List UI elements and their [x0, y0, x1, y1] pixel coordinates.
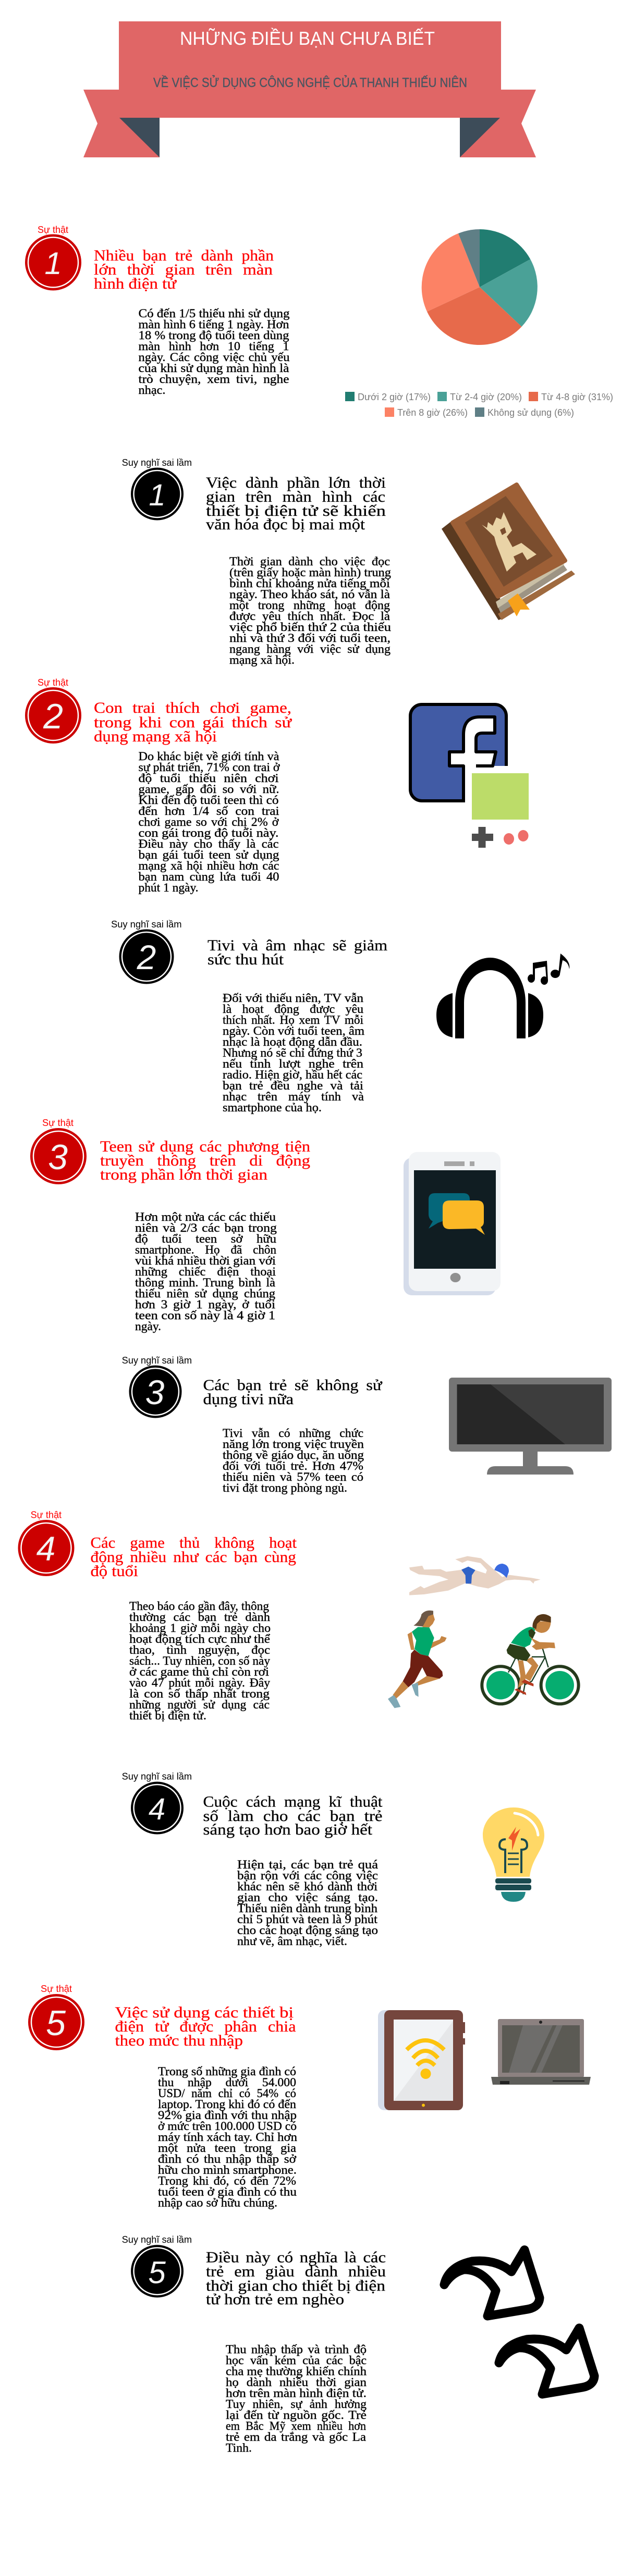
heading: fact 3 [100, 1138, 310, 1183]
text block: fact 2: sự phát triển, 71% con trai ở [139, 761, 280, 774]
heading: myth 1: Việc dành phần lớn thời [206, 474, 386, 491]
heading: fact 4: Các game thủ không hoạt [91, 1534, 297, 1552]
text block: myth 4: như vẽ, âm nhạc, viết. [237, 1935, 347, 1948]
text block: myth 5: cha mẹ thường khiến chính [226, 2364, 367, 2378]
heading: myth 4 [203, 1793, 383, 1838]
panel: fact 1 [25, 225, 613, 418]
text block: myth 1: ngày. Theo khảo sát, nó vẫn là [229, 588, 390, 601]
heading: myth 1 [206, 474, 386, 533]
heading: myth 3: dụng tivi nữa [203, 1391, 294, 1408]
heading: myth 5 [206, 2249, 386, 2308]
label: fact: Sự thật [38, 225, 68, 235]
panel: myth 5 [122, 2234, 594, 2454]
text block: myth 1: mạng xã hội. [229, 653, 295, 666]
chart legend: Từ 4-8 giờ (31%) [541, 392, 613, 402]
label: myth: Suy nghĩ sai lầm [122, 2234, 192, 2245]
heading: fact 1: lớn thời gian trên màn [94, 261, 273, 278]
text block: fact 2: con gái trong độ tuổi này. [139, 826, 278, 839]
text block: fact 5: USD/ năm chỉ có 54% có [158, 2087, 296, 2100]
text block: fact 3: thông minh. Trung bình là [135, 1276, 275, 1289]
text block: myth 3: Tivi vẫn có những chức [223, 1427, 363, 1440]
heading: fact 5: điện tử được phân chia [115, 2018, 296, 2035]
heading: myth 2: sức thu hút [208, 951, 284, 968]
text block: myth 5 [226, 2343, 367, 2454]
panel: fact 3 [30, 1118, 501, 1333]
text block: myth 1: được yêu thích nhất. Đọc là [229, 610, 390, 623]
text block: fact 3: niên và 2/3 các bạn trong [135, 1221, 277, 1234]
text block: fact 2: Do khác biệt về giới tính và [139, 750, 279, 763]
text block: fact 5: máy tính xách tay. Chỉ hơn [158, 2131, 298, 2144]
heading: myth 3: Các bạn trẻ sẽ không sử [203, 1377, 383, 1394]
text block: fact 5: hữu cho mình smartphone. [158, 2163, 297, 2176]
chart legend [345, 392, 613, 418]
badge: fact 4 [18, 1520, 74, 1576]
text block: fact 2: mạng xã hội nhiều hơn các [139, 859, 279, 872]
text block: myth 3: thiếu niên và 57% teen có [223, 1470, 363, 1483]
heading: myth 1: thiết bị điện tử sẽ khiến [206, 502, 386, 519]
badge: fact 3 [30, 1128, 87, 1184]
heading: myth 1: gian trên màn hình các [206, 488, 385, 505]
text block: myth 2: thích nhất. Họ xem TV mỗi [223, 1013, 363, 1026]
icon: smartphone [404, 1152, 501, 1295]
label: fact: Sự thật [42, 1118, 74, 1128]
heading: myth 5: Điều này có nghĩa là các [206, 2249, 386, 2266]
text block: fact 3: vùi khá nhiều thời gian với [135, 1254, 276, 1267]
text block: myth 4: cho các hoạt động sáng tạo [237, 1924, 378, 1937]
heading: myth 1: văn hóa đọc bị mai một [206, 516, 365, 533]
badge: myth 2 [119, 930, 174, 984]
arrow: second curved arrow [499, 2328, 594, 2394]
text block: myth 2: ngày. Còn với tuổi teen, âm [223, 1024, 364, 1037]
text block: fact 5: đình có thu nhập thấp sở [158, 2152, 297, 2165]
text block: myth 2: Đối với thiếu niên, TV vẫn [223, 992, 364, 1005]
text block: myth 2: nếu tính lượt nghe trên [223, 1057, 364, 1070]
text block: myth 5: hơn trên màn hình điện tử. [226, 2386, 367, 2400]
icon: swimmer [409, 1556, 541, 1595]
text block: myth 4 [237, 1858, 378, 1948]
text block: myth 3 [223, 1427, 364, 1494]
heading: myth 2 [208, 937, 387, 968]
text block: fact 4: là con số thấp nhất trong [129, 1687, 270, 1700]
label: myth: Suy nghĩ sai lầm [122, 1355, 192, 1366]
text block: myth 3: tivi đặt trong phòng ngủ. [223, 1481, 347, 1494]
badge: myth 3: 3 [145, 1373, 165, 1411]
heading: fact 5: Việc sử dụng các thiết bị [115, 2004, 294, 2021]
text block: fact 2: phút 1 ngày. [139, 881, 198, 894]
heading: fact 4: động nhiều như các bạn cùng [91, 1549, 296, 1566]
text block: fact 5: thu nhập dưới 54.000 [158, 2076, 296, 2089]
text block: fact 2: game, gấp đôi so với nữ. [139, 783, 279, 796]
text block: fact 2: độ tuổi thiếu niên chơi [139, 772, 278, 785]
main title: NHỮNG ĐIỀU BẠN CHƯA BIẾT [180, 28, 435, 49]
label: myth: Suy nghĩ sai lầm [111, 919, 181, 930]
heading: myth 4: số làm cho các bạn trẻ [203, 1807, 383, 1825]
icon: book [442, 485, 575, 620]
text block: fact 1: màn hình 6 tiếng 1 ngày. Hơn [139, 318, 289, 331]
icon: light bulb [483, 1807, 544, 1902]
text block: myth 5: học vấn kém của các bậc [226, 2354, 367, 2367]
text block: fact 1: trò chuyện, xem tivi, nghe [139, 373, 289, 386]
icon: tablet with wifi [378, 2010, 465, 2110]
text block: myth 5: lại đến từ nguồn gốc. Trẻ [226, 2408, 367, 2422]
text block: fact 5: 92% gia đình với thu nhập [158, 2109, 297, 2122]
badge: myth 4: 4 [149, 1792, 165, 1826]
heading: fact 4 [91, 1534, 297, 1580]
text block: fact 3: Hơn một nửa các các thiếu [135, 1210, 276, 1223]
text block: fact 2: bạn gái tuổi teen sử dụng [139, 848, 279, 861]
heading: fact 3: trong phần lớn thời gian [100, 1166, 267, 1183]
text block: myth 3: thông về giáo dục, ăn uống [223, 1448, 364, 1462]
text block: fact 1: của khi sử dụng màn hình là [139, 362, 289, 375]
title banner [83, 21, 536, 157]
text block: fact 3: hơn 3 giờ 1 ngày, ở tuổi [135, 1298, 275, 1311]
text block: fact 5: Trong khi đó, có đến 72% [158, 2174, 296, 2187]
heading: fact 2 [94, 699, 292, 745]
badge: myth 3 [129, 1365, 181, 1418]
badge: fact 5: 5 [46, 2003, 66, 2043]
text block: myth 4: gian cho việc sáng tạo. [237, 1891, 378, 1904]
text block: myth 4: bận rộn với các công việc [237, 1869, 378, 1882]
heading: myth 4: sáng tạo hơn bao giờ hết [203, 1821, 373, 1838]
heading: fact 3: Teen sử dụng các phương tiện [100, 1138, 310, 1155]
text block: myth 5: Thu nhập thấp và trình độ [226, 2343, 367, 2356]
text block: fact 1: ngày. Các công việc chủ yếu [139, 351, 290, 364]
text block: myth 5: em Bắc Mỹ xem nhiều hơn [226, 2420, 366, 2432]
icon: headphones [436, 958, 543, 1038]
text block: fact 3: ngày. [135, 1320, 161, 1333]
panel: fact 4 [18, 1510, 579, 1722]
badge: fact 2 [25, 687, 81, 744]
text block: myth 2: nhạc là hoạt động dẫn đầu. [223, 1035, 362, 1048]
text block: myth 1: Thời gian dành cho việc đọc [229, 555, 390, 568]
heading: fact 5: theo mức thu nhập [115, 2032, 243, 2049]
text block: myth 5: Tuy nhiên, sự ảnh hưởng [226, 2398, 367, 2410]
icon: runner [388, 1611, 447, 1708]
text block: fact 2: bạn nam cùng lứa tuổi 40 [139, 870, 279, 883]
heading: fact 4: độ tuổi [91, 1563, 138, 1580]
badge: fact 1 [25, 234, 81, 291]
text block: fact 5 [158, 2065, 298, 2209]
text block: fact 5: laptop. Trong khi đó có đến [158, 2098, 297, 2111]
text block: myth 3: đối với tuổi trẻ. Hơn 47% [223, 1459, 363, 1472]
text block: fact 5: tuổi teen ở gia đình có thu [158, 2185, 297, 2198]
text block: fact 4: những người sử dụng các [129, 1698, 270, 1711]
heading: fact 3: truyền thông trên di động [100, 1152, 310, 1169]
text block: fact 5: một nửa teen trong gia [158, 2141, 296, 2154]
text block: fact 2: chơi game so với chị 2% ở [139, 815, 279, 828]
text block: myth 1: việc phổ biến thứ 2 của thiếu [229, 621, 392, 634]
text block: myth 1: ngang hàng với việc sử dụng [229, 642, 391, 655]
text block: fact 4: thường các bạn trẻ dành [129, 1611, 271, 1624]
chart legend: Từ 2-4 giờ (20%) [450, 392, 522, 402]
panel: fact 5 [28, 1984, 591, 2209]
text block: fact 1: Có đến 1/5 thiếu nhi sử dụng [139, 307, 290, 320]
text block: fact 4: thao, tình nguyện, đọc [129, 1643, 270, 1656]
text block: myth 2: bạn trẻ đều nghe và tải [223, 1079, 363, 1092]
text block: fact 1: nhạc. [139, 383, 166, 397]
text block: myth 2: Nhưng nó sẽ chỉ đứng thứ 3 [223, 1046, 362, 1059]
text block: myth 2: là hoạt động được yêu [223, 1002, 364, 1015]
badge: myth 2: 2 [137, 938, 156, 976]
text block: fact 3 [135, 1210, 277, 1333]
badge: myth 1 [131, 468, 184, 520]
text block: fact 4: thiết bị điện tử. [129, 1709, 206, 1722]
text block: myth 1: nhi và thứ 3 đối với tuổi teen, [229, 631, 391, 645]
badge: myth 4 [131, 1782, 184, 1834]
heading: myth 5: trẻ em giàu dành nhiều [206, 2263, 386, 2280]
badge: fact 3: 3 [48, 1137, 68, 1177]
badge: fact 4: 4 [36, 1529, 55, 1568]
text block: myth 5: họ dành nhiều thời gian [226, 2376, 367, 2388]
panel: myth 1 [122, 457, 575, 666]
text block: fact 4: hoạt động tích cực như thể [129, 1632, 271, 1645]
panel: myth 2 [111, 919, 569, 1114]
badge: myth 1: 1 [149, 478, 166, 512]
text block: myth 2 [223, 992, 364, 1114]
subtitle: VỀ VIỆC SỬ DỤNG CÔNG NGHỆ CỦA THANH THIẾU NIÊN [153, 75, 467, 90]
label: myth: Suy nghĩ sai lầm [122, 1772, 192, 1782]
text block: fact 2: Khi đến độ tuổi teen thì có [139, 794, 278, 807]
label: fact: Sự thật [31, 1510, 62, 1520]
text block: fact 4: ở các game thủ chỉ còn rơi [129, 1665, 269, 1678]
heading: fact 2: dụng mạng xã hội [94, 728, 217, 745]
text block: fact 2: Điều này cho thấy là các [139, 837, 278, 850]
text block: myth 5: trẻ em da trắng và gốc La [226, 2430, 366, 2444]
text block: myth 3: năng lớn trong việc truyền [223, 1438, 364, 1451]
text block: myth 4: Thiếu niên dành trung bình [237, 1902, 378, 1915]
text block: myth 1: (trên giấy hoặc màn hình) trung [229, 566, 392, 579]
icon: laptop [491, 2019, 591, 2085]
text block: fact 1: 18 % trong độ tuổi teen dùng [139, 329, 289, 342]
label: fact: Sự thật [38, 677, 68, 688]
heading: fact 2: trong khi con gái thích sử [94, 714, 292, 731]
text block: fact 1 [139, 307, 290, 397]
panel: myth 4 [122, 1772, 544, 1948]
text block: myth 2: radio. Hiện giờ, hầu hết các [223, 1068, 362, 1081]
heading: myth 4: Cuộc cách mạng kĩ thuật [203, 1793, 383, 1810]
text block: fact 5: Trong số những gia đình có [158, 2065, 296, 2078]
text block: fact 2: đến hơn 1/4 số con trai [139, 804, 279, 818]
text block: myth 5: Tinh. [226, 2442, 252, 2454]
panel: fact 2 [25, 677, 529, 894]
text block: myth 4: Hiện tại, các bạn trẻ quá [237, 1858, 378, 1871]
text block: myth 4: khác nên sẽ khó dành thời [237, 1880, 377, 1893]
text block: fact 4: Theo báo cáo gần đây, thông [129, 1600, 270, 1613]
label: myth: Suy nghĩ sai lầm [122, 457, 192, 468]
badge: myth 5 [131, 2245, 184, 2298]
text block: fact 4 [129, 1600, 271, 1722]
text block: fact 4: khoảng 1 giờ mỗi ngày cho [129, 1621, 271, 1634]
text block: fact 1: màn hình hơn 10 tiếng 1 [139, 340, 289, 353]
icon: game controller [472, 773, 529, 848]
chart legend: Không sử dụng (6%) [487, 407, 574, 418]
heading: myth 5: thời gian cho thiết bị điện [206, 2277, 385, 2295]
heading: fact 2: Con trai thích chơi game, [94, 699, 291, 716]
heading: myth 5: tử hơn trẻ em nghèo [206, 2290, 344, 2308]
pie chart: screen time [422, 229, 538, 345]
text block: myth 4: chỉ 5 phút và teen là 9 phút [237, 1913, 378, 1926]
heading: fact 1: hình điện tử [94, 275, 177, 292]
text block: myth 2: smartphone của họ. [223, 1101, 322, 1114]
heading: myth 2: Tivi và âm nhạc sẽ giảm [208, 937, 387, 954]
text block: fact 4: sách... Tuy nhiên, con số này [129, 1654, 270, 1667]
heading: fact 1: Nhiều bạn trẻ dành phần [94, 247, 274, 264]
text block: fact 3: teen con số này là 4 giờ 1 [135, 1309, 275, 1322]
text block: fact 5: ở mức trên 100.000 USD có [158, 2120, 297, 2133]
text block: myth 2: nhạc trên máy tính và [223, 1090, 364, 1103]
text block: myth 1: một trong những hoạt động [229, 599, 391, 612]
badge: fact 2: 2 [43, 697, 63, 736]
badge: fact 5 [28, 1994, 84, 2050]
panel: myth 3 [122, 1355, 612, 1494]
text block: myth 1: bình chỉ khoảng nửa tiếng mỗi [229, 577, 390, 590]
arrow: first curved arrow [444, 2250, 540, 2316]
chart legend: Dưới 2 giờ (17%) [358, 392, 431, 402]
icon: cyclist [482, 1614, 579, 1704]
badge: myth 5: 5 [148, 2255, 166, 2290]
heading: myth 3 [203, 1377, 383, 1408]
heading: fact 5 [115, 2004, 296, 2049]
text block: fact 2 [139, 750, 280, 894]
icon: facebook logo [410, 704, 512, 808]
text block: fact 3: smartphone. Họ đã chôn [135, 1243, 276, 1256]
badge: fact 1: 1 [44, 246, 62, 281]
icon: television [449, 1378, 612, 1475]
icon: music notes [528, 953, 569, 985]
text block: myth 1 [229, 555, 392, 666]
text block: fact 3: thiếu niên sử dụng chúng [135, 1287, 276, 1300]
chart legend: Trên 8 giờ (26%) [397, 407, 468, 418]
text block: fact 5: nhập cao sở hữu chúng. [158, 2196, 277, 2209]
text block: fact 4: vào 47 phút mỗi ngày. Đây [129, 1676, 271, 1689]
label: fact: Sự thật [41, 1984, 72, 1994]
heading: fact 1 [94, 247, 274, 292]
text block: fact 3: độ tuổi teen sở hữu [135, 1232, 277, 1245]
text block: fact 3: những chiếc điện thoại [135, 1265, 276, 1278]
